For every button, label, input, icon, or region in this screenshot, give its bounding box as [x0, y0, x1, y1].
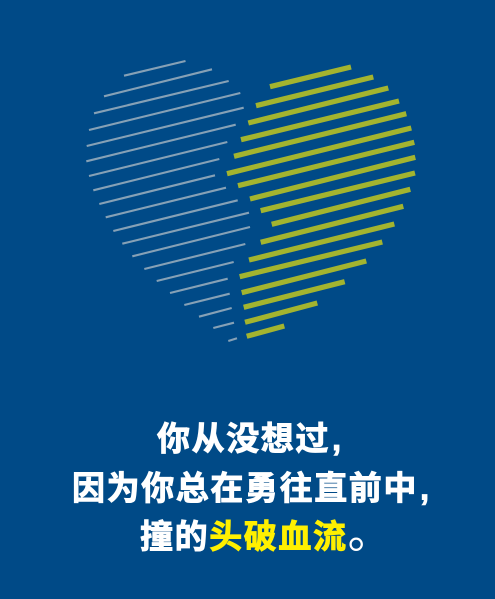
heart left half: gray stripes [86, 61, 250, 341]
icon: striped heart [86, 61, 415, 341]
caption line 2: 因为你总在勇往直前中, [72, 470, 431, 506]
caption line 1: 你从没想过, [157, 420, 343, 457]
caption text [72, 420, 431, 558]
heart right half: green stripes [227, 67, 415, 336]
caption line 3: 撞的头破血流。 [140, 509, 393, 558]
